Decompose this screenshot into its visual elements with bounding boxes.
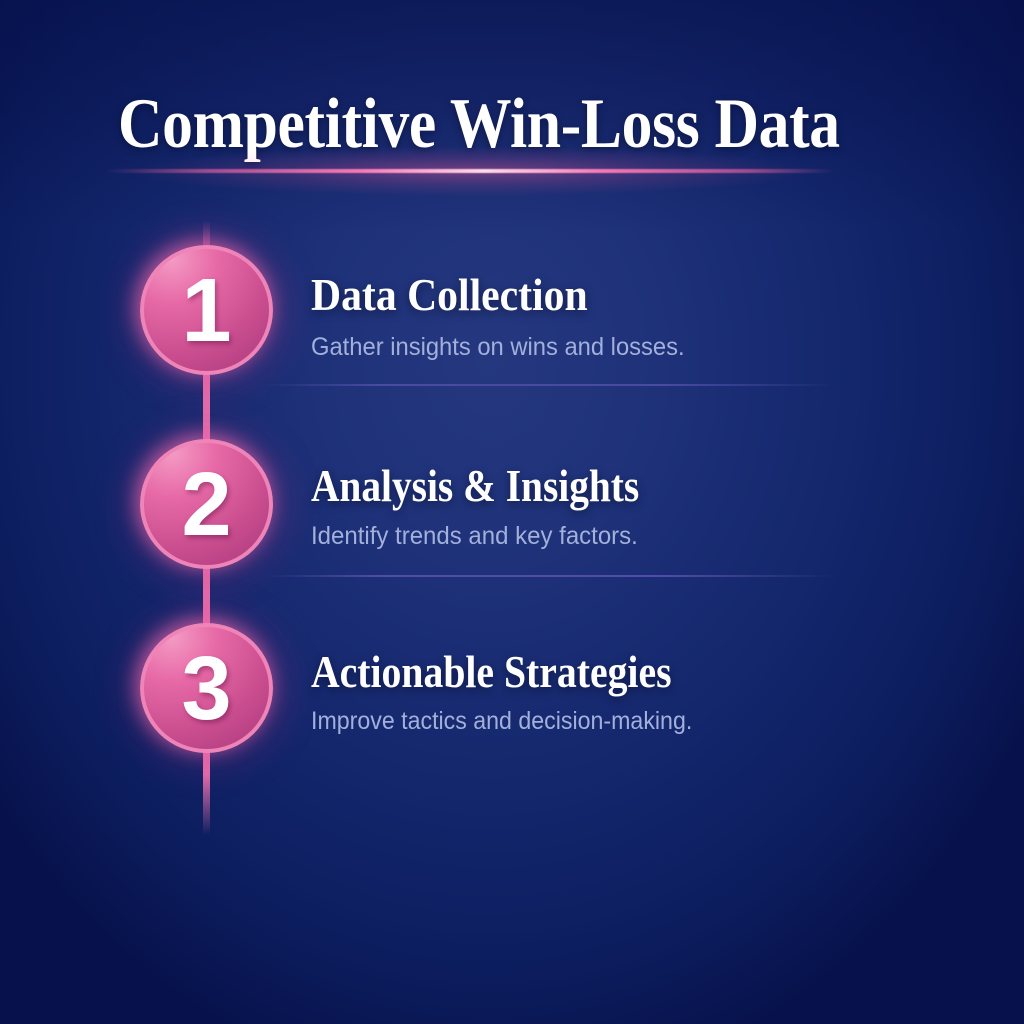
step 3 number badge: 3 <box>181 639 232 739</box>
title underline <box>105 169 835 173</box>
step 2 number badge <box>140 439 273 569</box>
step 1 number badge: 1 <box>181 261 232 361</box>
step 3 description: Improve tactics and decision-making. <box>311 707 692 735</box>
timeline connector <box>203 220 210 835</box>
step 1 number badge <box>140 245 273 375</box>
step 3 number badge <box>140 623 273 753</box>
title: Competitive Win-Loss Data <box>118 85 840 163</box>
step 3 heading: Actionable Strategies <box>311 646 672 697</box>
title underline glow <box>130 146 810 196</box>
step 2 description: Identify trends and key factors. <box>311 522 638 550</box>
step 1 heading: Data Collection <box>311 269 588 320</box>
step 2 heading: Analysis & Insights <box>311 460 639 511</box>
step 2 number badge: 2 <box>181 455 232 555</box>
step 1 description: Gather insights on wins and losses. <box>311 333 685 361</box>
